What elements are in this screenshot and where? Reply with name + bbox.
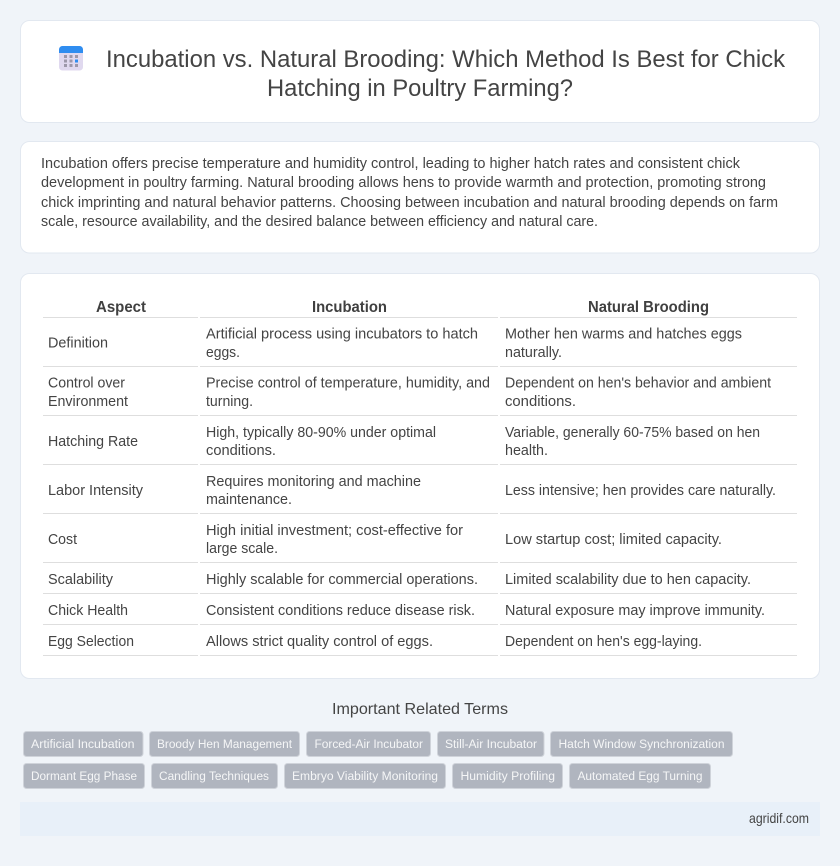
row: cost: large scale. — [206, 541, 278, 557]
row: scalability: Highly scalable for commercial operations. — [206, 572, 478, 588]
row: cost: Low startup cost; limited capacity. — [505, 532, 722, 548]
row: control over environment: Dependent on hen's behavior and ambient — [505, 376, 771, 392]
tags: related terms — [24, 732, 732, 788]
table header: Incubation — [312, 299, 387, 316]
row: hatching rate: Hatching Rate — [48, 434, 138, 450]
row: labor intensity — [48, 474, 776, 508]
tag: forced-air incubator: Forced-Air Incubator — [314, 737, 423, 751]
row: labor intensity: Requires monitoring and machine — [206, 474, 421, 490]
row: definition — [48, 326, 742, 361]
tag: still-air incubator — [438, 732, 544, 756]
row: hatching rate — [48, 425, 760, 459]
row: cost: High initial investment; cost-effective for — [206, 523, 463, 539]
row: definition: Mother hen warms and hatches eggs — [505, 326, 742, 342]
panel: introduction text: chick imprinting and natural behavior patterns. Choosing between incubation and natural brooding depends on farm — [41, 195, 778, 211]
panel: introduction text: Incubation offers precise temperature and humidity control, leading to higher hatch rates and consistent chick — [41, 156, 741, 172]
row: cost: Cost — [48, 532, 77, 548]
heading: important related terms: Important Related Terms — [332, 701, 508, 718]
row: chick health: Natural exposure may improve immunity. — [505, 603, 765, 619]
row: hatching rate: High, typically 80-90% under optimal — [206, 425, 436, 441]
row: scalability: Scalability — [48, 572, 114, 588]
footer — [20, 802, 820, 836]
panel: introduction text — [20, 142, 820, 253]
tag: embryo viability monitoring: Embryo Viability Monitoring — [292, 769, 438, 783]
tag: humidity profiling — [452, 764, 562, 788]
row: definition: naturally. — [505, 345, 562, 361]
row: control over environment: turning. — [206, 394, 253, 410]
row: labor intensity: Less intensive; hen provides care naturally. — [505, 483, 776, 499]
row: hatching rate: Variable, generally 60-75% based on hen — [505, 425, 760, 441]
row: scalability — [48, 572, 751, 588]
row: egg selection: Egg Selection — [48, 634, 134, 650]
row: labor intensity: maintenance. — [206, 492, 292, 508]
row: cost — [48, 523, 722, 557]
panel: introduction text: scale, resource availability, and the desired balance between efficiency and natural care. — [41, 214, 598, 230]
title: Incubation vs. Natural Brooding: Which Method Is Best for Chick — [106, 46, 786, 73]
table header: Natural Brooding — [588, 299, 709, 316]
panel: comparison table — [20, 274, 820, 678]
row: egg selection: Allows strict quality control of eggs. — [206, 634, 433, 650]
row: egg selection — [48, 634, 702, 650]
tag: automated egg turning — [570, 764, 710, 788]
tag: candling techniques — [152, 764, 278, 788]
tag: embryo viability monitoring — [284, 764, 446, 788]
row: control over environment: conditions. — [505, 394, 576, 410]
tag: artificial incubation — [24, 732, 143, 756]
tag: humidity profiling: Humidity Profiling — [460, 769, 555, 783]
tag: hatch window synchronization — [550, 732, 732, 756]
tag: broody hen management — [150, 732, 300, 756]
row: labor intensity: Labor Intensity — [48, 483, 144, 499]
tag: hatch window synchronization: Hatch Window Synchronization — [558, 737, 724, 751]
row: definition: eggs. — [206, 345, 240, 361]
title — [106, 46, 786, 102]
row: definition: Artificial process using incubators to hatch — [206, 326, 478, 342]
row: scalability: Limited scalability due to hen capacity. — [505, 572, 751, 588]
row: chick health: Consistent conditions reduce disease risk. — [206, 603, 475, 619]
row: control over environment — [48, 376, 771, 410]
title: Hatching in Poultry Farming? — [267, 75, 573, 102]
tag: still-air incubator: Still-Air Incubator — [445, 737, 537, 751]
tag: forced-air incubator — [306, 732, 430, 756]
row: chick health: Chick Health — [48, 603, 128, 619]
tag: broody hen management: Broody Hen Management — [157, 737, 293, 751]
tag: automated egg turning: Automated Egg Turning — [578, 769, 702, 783]
table header — [96, 299, 709, 316]
row: hatching rate: health. — [505, 443, 548, 459]
tag: dormant egg phase — [24, 764, 144, 788]
table header: Aspect — [96, 299, 147, 316]
row: control over environment: Precise control of temperature, humidity, and — [206, 376, 490, 392]
row: chick health — [48, 603, 765, 619]
tag: candling techniques: Candling Techniques — [159, 769, 269, 783]
row: control over environment: Environment — [48, 394, 128, 410]
row: definition: Definition — [48, 336, 108, 352]
row: egg selection: Dependent on hen's egg-laying. — [505, 634, 702, 650]
panel: title card — [20, 20, 820, 122]
icon: calendar — [59, 46, 83, 70]
tag: dormant egg phase: Dormant Egg Phase — [31, 769, 137, 783]
row: control over environment: Control over — [48, 376, 125, 392]
row: hatching rate: conditions. — [206, 443, 276, 459]
panel: introduction text: development in poultry farming. Natural brooding allows hens to provide warmth and protection, promoting strong — [41, 175, 766, 191]
footer: agridif.com — [749, 811, 809, 826]
tag: artificial incubation: Artificial Incubation — [31, 737, 134, 751]
